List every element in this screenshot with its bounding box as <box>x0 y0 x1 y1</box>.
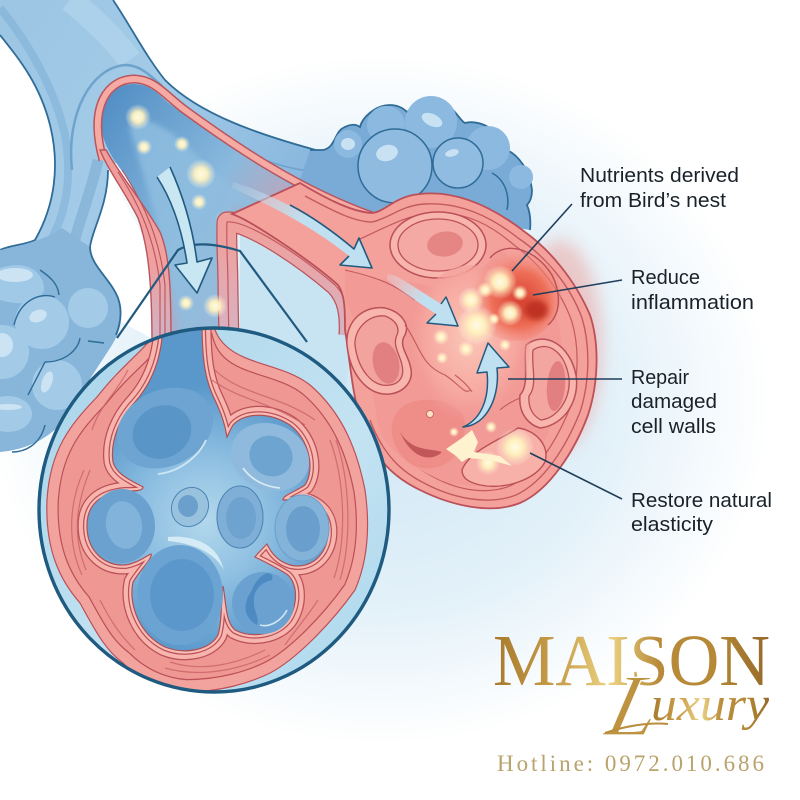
large cell upper left <box>117 388 212 475</box>
top chamber <box>390 212 486 278</box>
light blue gap between duct and sac <box>240 233 350 400</box>
cell right <box>275 495 329 561</box>
central lumen <box>345 250 562 486</box>
arrow: toward sac <box>232 182 372 268</box>
callout: repair: Repair <box>631 366 689 389</box>
arrow: curved upward <box>463 343 509 427</box>
small cell centre <box>171 486 210 528</box>
duct lighter core <box>130 121 300 340</box>
lumen <box>87 320 328 651</box>
arrow: down into lens <box>157 167 212 293</box>
inflammation hot spot <box>469 249 561 341</box>
callout: restore: Restore natural <box>631 489 772 512</box>
upper right chamber wall <box>490 248 558 325</box>
bottom chamber <box>462 428 546 486</box>
right chamber <box>520 339 577 428</box>
cell left <box>98 489 155 563</box>
blue duct nutrient particles <box>125 104 227 318</box>
brand logo <box>493 620 770 776</box>
brand name: MAISON <box>493 620 770 701</box>
callout: repair: cell walls <box>631 415 716 438</box>
callout: restore: elasticity <box>631 513 714 536</box>
light swirl <box>168 537 224 570</box>
muscle fibres <box>72 370 348 672</box>
callout: reduce inflammation: Reduce <box>631 266 700 289</box>
magnifier cone lines <box>117 244 307 342</box>
pink outer wall <box>47 320 368 692</box>
callout: nutrients: Nutrients derived <box>580 164 739 187</box>
hotline: Hotline: 0972.010.686 <box>497 751 764 776</box>
large cell bottom <box>137 545 223 645</box>
oval cell centre <box>217 486 263 548</box>
left chamber <box>347 308 411 394</box>
sac contours <box>305 196 588 500</box>
magnifier rim <box>39 328 389 692</box>
red halo <box>518 240 602 450</box>
bronchiole tube <box>0 0 420 330</box>
callout: nutrients: from Bird’s nest <box>580 189 726 212</box>
left alveolar lobe cluster <box>0 228 121 452</box>
magnified cross-section <box>39 320 389 692</box>
healing spark <box>446 430 512 466</box>
glowing nutrient particles in sac <box>433 265 534 475</box>
arrow: into centre of sac <box>387 274 458 326</box>
sac body <box>232 183 597 508</box>
lower left chamber <box>392 400 465 468</box>
brand script: uxury <box>651 678 770 731</box>
brand script initial: L <box>596 657 671 755</box>
cell upper right <box>231 422 310 491</box>
brand swash <box>605 723 668 733</box>
light gap between left lobe and duct <box>90 170 155 340</box>
upper right lobe cluster <box>300 96 533 230</box>
callout leader lines <box>508 204 622 499</box>
duct lumen <box>100 84 375 345</box>
duct wall upper <box>98 79 372 216</box>
inflamed alveolar sac <box>232 183 602 508</box>
duct wall right <box>227 222 349 345</box>
callout: repair: damaged <box>631 390 717 413</box>
duct wall left <box>100 150 171 345</box>
central lighter area <box>410 265 530 425</box>
lumen wall layers <box>87 320 328 651</box>
inner folds <box>345 270 520 410</box>
callout: reduce inflammation: inflammation <box>631 291 754 314</box>
magnifier disc <box>39 328 389 692</box>
cell bottom right with crescent <box>232 572 294 634</box>
alveolar duct <box>98 79 375 345</box>
cells <box>89 372 329 645</box>
